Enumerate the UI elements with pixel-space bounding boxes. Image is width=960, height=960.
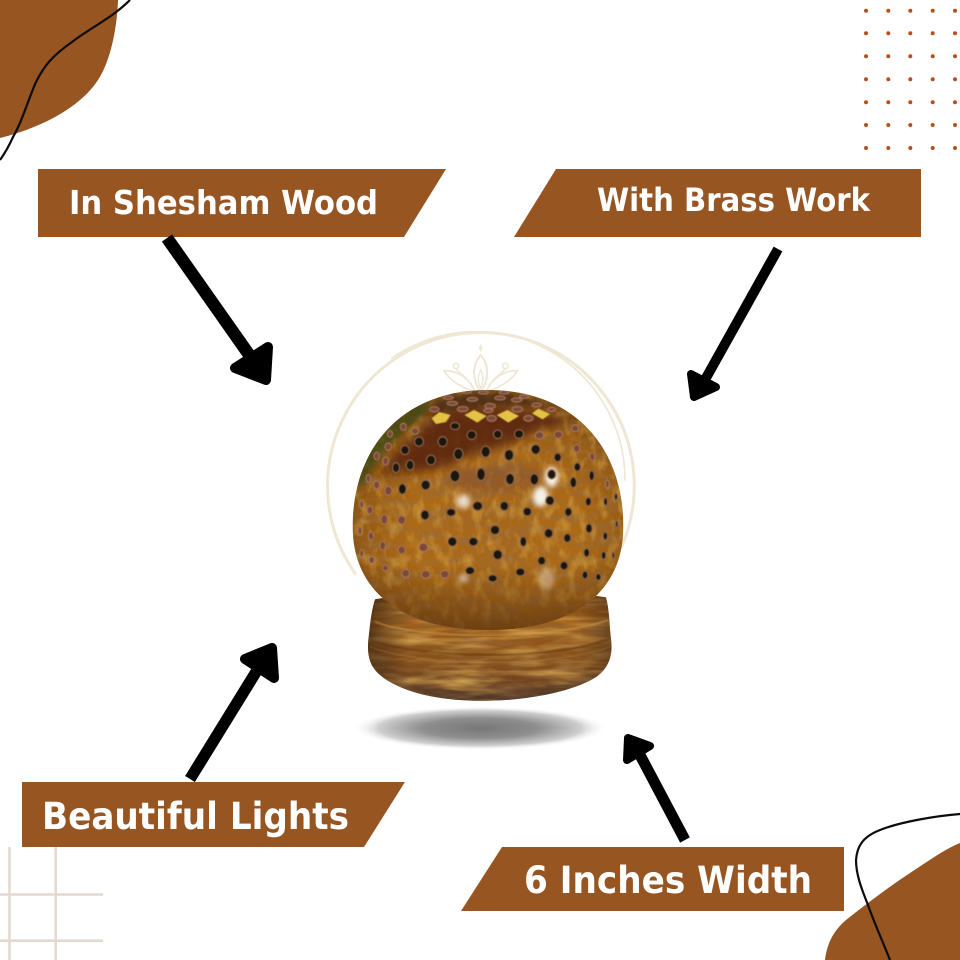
- decorative blob: top left: [0, 0, 130, 160]
- arrow: from In Shesham Wood to lamp: [167, 238, 268, 380]
- banner: In Shesham Wood: In Shesham Wood: [69, 183, 378, 222]
- highlights: [456, 445, 558, 590]
- banner: 6 Inches Width: [461, 847, 844, 911]
- dot grid: top right: [864, 9, 957, 150]
- banner: With Brass Work: [514, 169, 921, 237]
- perforations: dim outer holes: [358, 390, 609, 578]
- banner: Beautiful Lights: [22, 782, 405, 847]
- banner: 6 Inches Width: 6 Inches Width: [524, 859, 812, 902]
- gold cut-outs: [432, 409, 550, 424]
- watermark logo behind lamp: [328, 332, 634, 573]
- arrow: from 6 Inches Width to lamp: [627, 738, 685, 840]
- sphere body: [350, 387, 627, 633]
- banner: Beautiful Lights: Beautiful Lights: [42, 795, 349, 838]
- decorative blob: bottom right: [825, 814, 960, 960]
- banner: With Brass Work: With Brass Work: [597, 181, 871, 219]
- perforations: dark inner holes: [392, 422, 618, 582]
- banner: In Shesham Wood: [38, 169, 446, 237]
- base of lamp: [368, 596, 612, 701]
- line grid: bottom left: [0, 847, 103, 960]
- drop shadow under lamp: [353, 707, 607, 751]
- arrow: from With Brass Work to lamp: [691, 249, 778, 397]
- product: wooden sphere lamp: [328, 332, 634, 707]
- arrow: from Beautiful Lights to lamp: [190, 648, 274, 779]
